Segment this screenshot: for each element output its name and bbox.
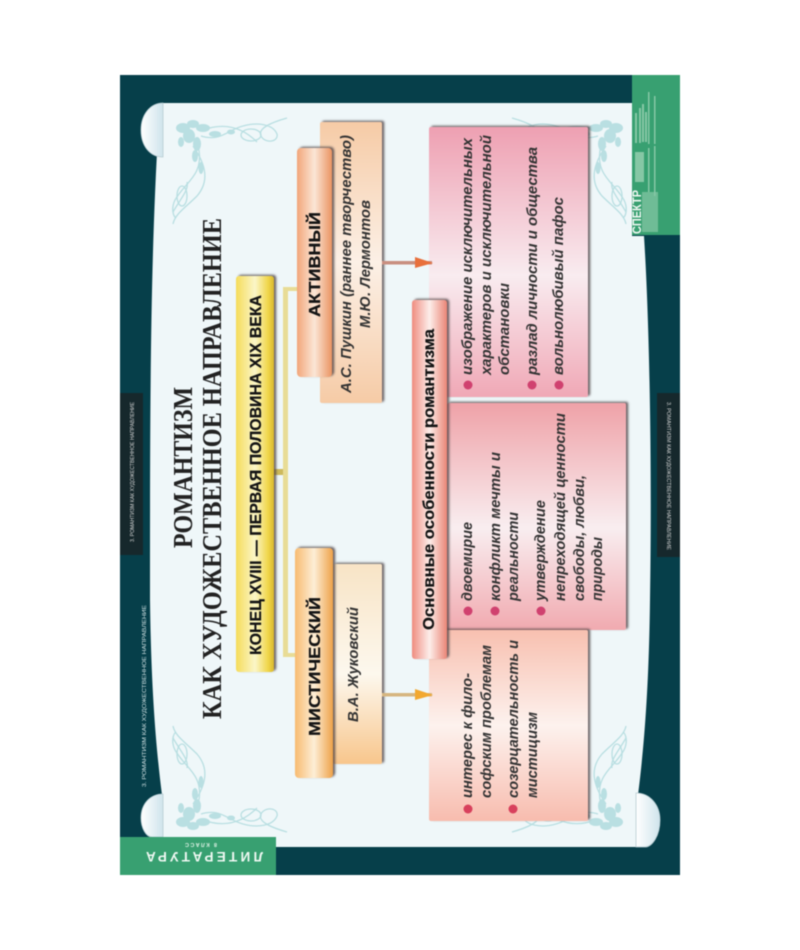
heading text: МИСТИЧЕСКИЙ [305,597,324,736]
heading text: АКТИВНЫЙ [305,212,324,317]
list text: интерес к фило- [460,673,476,798]
list text: вольнолюбивый пафос [551,197,567,375]
grade: 8 КЛАСС [185,841,217,847]
green publisher block [630,75,680,235]
list text: природы [590,536,606,601]
list text [460,640,541,798]
list text: свободы, любви, [572,475,588,601]
publisher name: СПЕКТР [630,190,644,234]
list text: софским проблемам [479,645,495,798]
feature panel: active [429,127,588,397]
author text: В.А. Жуковский [346,607,362,722]
dark teal poster frame [120,75,680,875]
arrow: active to features [382,257,433,268]
list text: разлад личности и общества [525,147,541,376]
main features bar: Основные особенности романтизма [421,329,438,630]
branch: active romanticism [297,122,382,403]
parchment scroll [141,103,660,847]
scroll roll: top left [141,103,163,157]
period bar: КОНЕЦ XVIII — ПЕРВАЯ ПОЛОВИНА XIX ВЕКА [248,295,265,655]
bullets [464,804,518,814]
list text: мистицизм [525,712,541,798]
scroll roll: bottom left [141,794,163,837]
green subject block [120,837,276,875]
left margin caption: 3. РОМАНТИЗМ КАК ХУДОЖЕСТВЕННОЕ НАПРАВЛЕНИЕ [142,605,148,787]
right black caption strip [657,393,680,557]
author panel [333,564,382,764]
title: РОМАНТИЗМ [168,387,198,548]
subject name: ЛИТЕРАТУРА [146,849,263,864]
heading bar [297,148,332,377]
list text: реальности [506,512,522,602]
authors text: А.С. Пушкин (раннее творчество) [339,135,355,394]
list text: двоемирие [460,522,476,601]
list text: созерцательность и [506,640,522,798]
authors panel [320,122,382,403]
ornament: top right corner [512,118,626,224]
feature panel: mystic [429,630,588,821]
left black caption strip: 3. РОМАНТИЗМ КАК ХУДОЖЕСТВЕННОЕ НАПРАВЛЕНИЕ [130,401,136,542]
ornament: top left corner [173,118,287,224]
scroll roll: bottom right [636,793,660,847]
right black caption strip: 3. РОМАНТИЗМ КАК ХУДОЖЕСТВЕННОЕ НАПРАВЛЕНИЕ [665,402,671,551]
arrow: mystic to features [382,689,433,700]
feature panel: shared [447,403,626,630]
ornament: bottom left corner [173,726,287,832]
connector bracket [274,287,298,657]
title: КАК ХУДОЖЕСТВЕННОЕ НАПРАВЛЕНИЕ [197,218,227,719]
bullets [464,380,564,390]
list text: обстановки [497,283,513,375]
bullets [464,606,546,616]
publisher small print [635,92,658,232]
list text: непреходящей ценности [553,413,569,601]
list text: характеров и исключительной [479,135,495,376]
list text: конфликт мечты и [488,452,504,601]
left black caption strip [120,393,143,555]
ornament: bottom right corner [512,726,626,832]
authors text [339,135,374,394]
list text: изображение исключительных [460,137,476,375]
period bar [236,276,274,672]
branch: mystic romanticism [295,548,382,778]
list text [460,135,567,376]
list text [460,413,606,602]
title [168,218,227,719]
heading bar [295,548,333,778]
authors text: М.Ю. Лермонтов [358,200,374,328]
list text: утверждение [533,500,549,602]
main features bar [412,300,447,659]
